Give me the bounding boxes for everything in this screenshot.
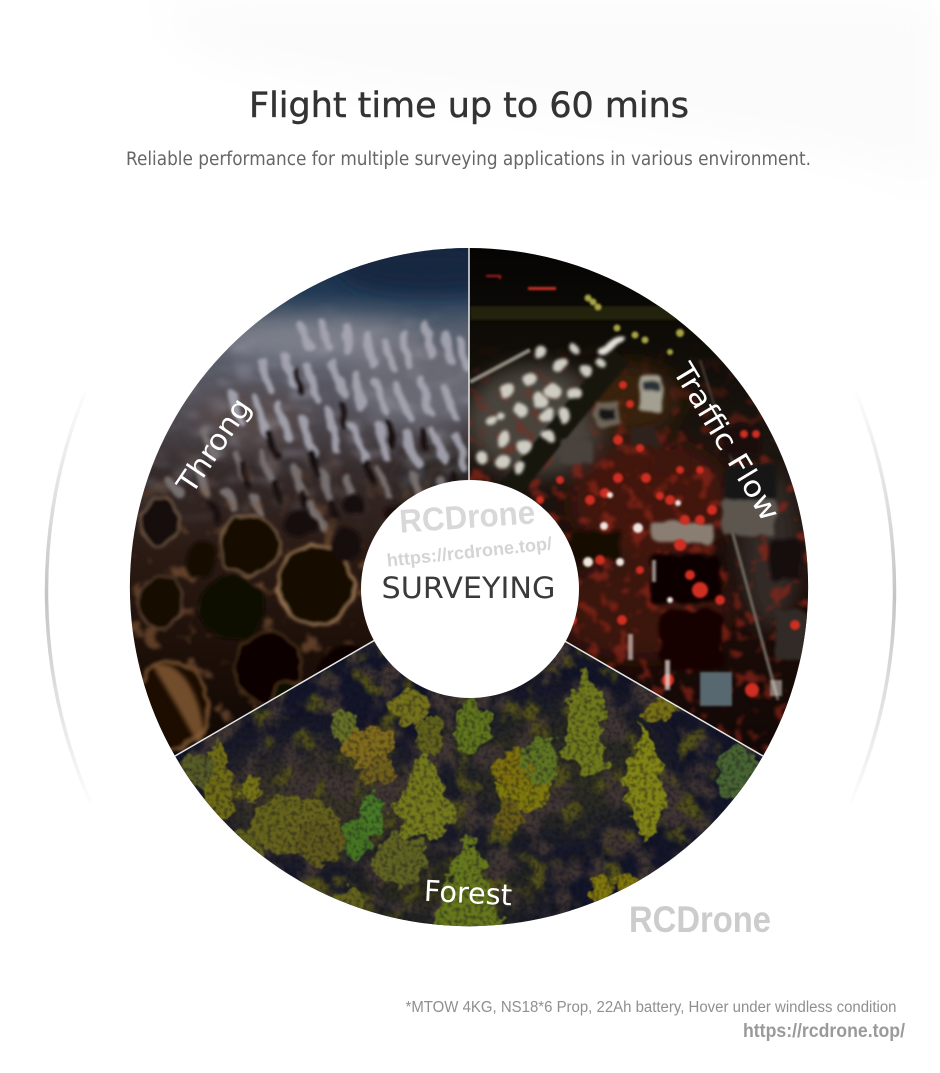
overpass and signs	[470, 276, 778, 700]
white oncoming headlights	[476, 332, 628, 474]
pie chart of surveying applications	[125, 244, 815, 932]
watermark: URL hub: https://rcdrone.top/	[386, 533, 553, 571]
watermark: RCDrone: RCDrone	[629, 899, 771, 940]
segment divider: top	[468, 248, 470, 480]
olive trees	[178, 665, 760, 932]
right decorative arc	[849, 390, 894, 806]
mottled canopy	[170, 640, 770, 930]
segment divider: lower left	[175, 640, 375, 756]
left decorative arc	[47, 390, 92, 806]
watermark: RCDrone hub: RCDrone	[398, 493, 536, 540]
segment divider: lower right	[563, 640, 763, 756]
red brake lights	[536, 381, 800, 697]
center label: SURVEYING: SURVEYING	[382, 571, 556, 605]
watermark: URL: https://rcdrone.top/	[743, 1021, 906, 1042]
subtitle: Reliable performance for multiple surveying applications in various environment.	[126, 149, 811, 170]
label: Forest: Forest	[423, 874, 513, 912]
panel: traffic flow photo	[465, 245, 815, 760]
footnote: *MTOW 4KG, NS18*6 Prop, 22Ah battery, Hover under windless condition	[406, 999, 896, 1016]
title: Flight time up to 60 mins	[249, 86, 689, 126]
white highlights of lights	[583, 492, 782, 706]
cars	[560, 375, 807, 670]
panel: forest photo	[170, 640, 770, 932]
crowd heads	[136, 494, 418, 749]
label: Traffic Flow: Traffic Flow	[666, 356, 787, 527]
center hub	[361, 480, 579, 698]
forest speckle texture	[170, 640, 770, 930]
label: Throng: Throng	[169, 392, 258, 500]
background wash	[150, 0, 940, 190]
yellow street lights	[584, 294, 684, 355]
panel: throng crowd photo	[130, 248, 469, 756]
